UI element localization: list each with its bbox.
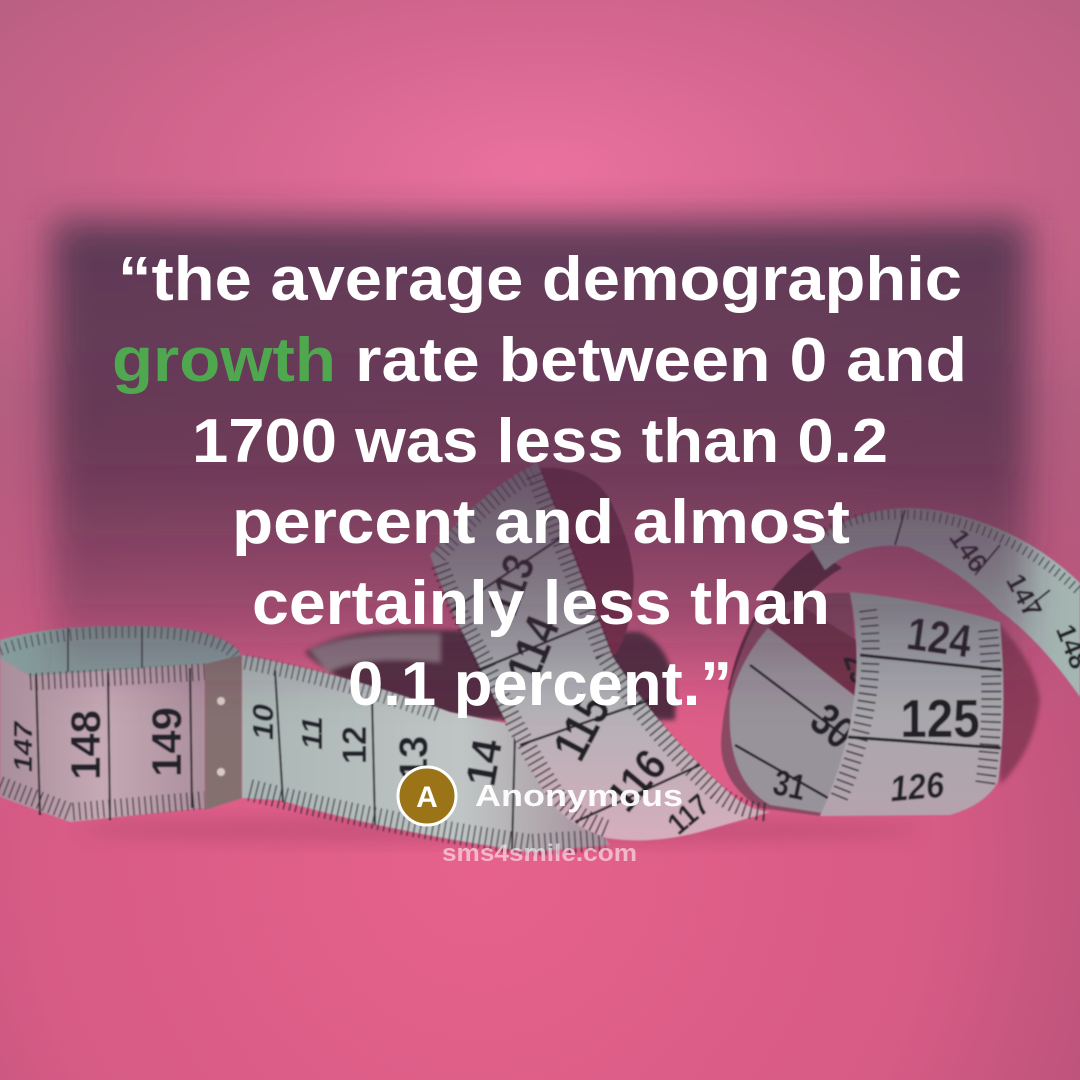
- tape: far right loop: [728, 508, 1080, 697]
- tape: back piece right of panel: [995, 620, 1040, 785]
- tape: far right loop: 146: [943, 524, 994, 578]
- tape: left front strip 147 148 149: [0, 658, 205, 822]
- tape: back of right loop: [721, 593, 855, 816]
- tape: inner face with 29 30 31: [730, 605, 882, 815]
- tape measure photo illustration: [0, 463, 1080, 852]
- tape: inner face with 29 30 31: 29: [836, 647, 882, 689]
- quote line 3: 1700 was less than 0.2: [192, 407, 888, 476]
- tape: right panel 124 125 126: [820, 592, 1004, 816]
- tape: tall ribbon 112 to 117: 116: [597, 740, 676, 821]
- tape: middle strip 10 to 14: 12: [336, 726, 374, 764]
- quote line 5: certainly less than: [252, 569, 830, 638]
- quote line 4: percent and almost: [232, 488, 850, 557]
- tape: middle strip 10 to 14: 14: [457, 735, 511, 790]
- tape: left back strip: [0, 626, 240, 676]
- quote line 2: highlighted word growth: growth: [112, 326, 336, 395]
- dark blurred text panel: [52, 220, 1028, 700]
- website credit: sms4smile.com: [442, 840, 637, 867]
- tape: middle strip 10 to 14: 10: [248, 704, 280, 740]
- tape: tall ribbon 112 to 117: 115: [543, 686, 621, 769]
- tape: right panel 124 125 126: 126: [888, 765, 947, 810]
- quote text: [112, 245, 967, 719]
- tape: coil in background: [305, 629, 676, 720]
- tape: right panel 124 125 126: 125: [900, 688, 980, 749]
- tape: tall ribbon 112 to 117: [430, 463, 770, 842]
- quote line 6: 0.1 percent.”: [348, 650, 732, 719]
- author avatar: A: [416, 781, 438, 814]
- tape: left front strip 147 148 149: 148: [62, 710, 109, 780]
- tape: inner face with 29 30 31: 31: [770, 761, 810, 808]
- quote line 1: “the average demographic: [118, 245, 962, 314]
- tape: middle strip 10 to 14: [242, 655, 610, 852]
- tape: middle strip 10 to 14: 13: [392, 736, 436, 780]
- tape: far right loop: 147: [1000, 569, 1048, 623]
- tape: metal end tip: [205, 655, 242, 810]
- tape: middle strip 10 to 14: 11: [297, 716, 329, 750]
- tape: tall ribbon 112 to 117: 117: [661, 788, 716, 842]
- tape: back of tall loop: [540, 468, 634, 657]
- tape: right panel 124 125 126: 124: [904, 608, 975, 667]
- quote line 2: remainder: rate between 0 and: [355, 326, 967, 395]
- tape: tall ribbon 112 to 117: 113: [477, 548, 544, 622]
- tape: inner face with 29 30 31: 30: [801, 693, 866, 759]
- tape: tall ribbon 112 to 117: 114: [497, 609, 570, 690]
- tape: left front strip 147 148 149: 147: [9, 720, 37, 772]
- tape: left front strip 147 148 149: 149: [143, 707, 190, 777]
- author name: Anonymous: [475, 778, 683, 813]
- author avatar: [398, 767, 456, 825]
